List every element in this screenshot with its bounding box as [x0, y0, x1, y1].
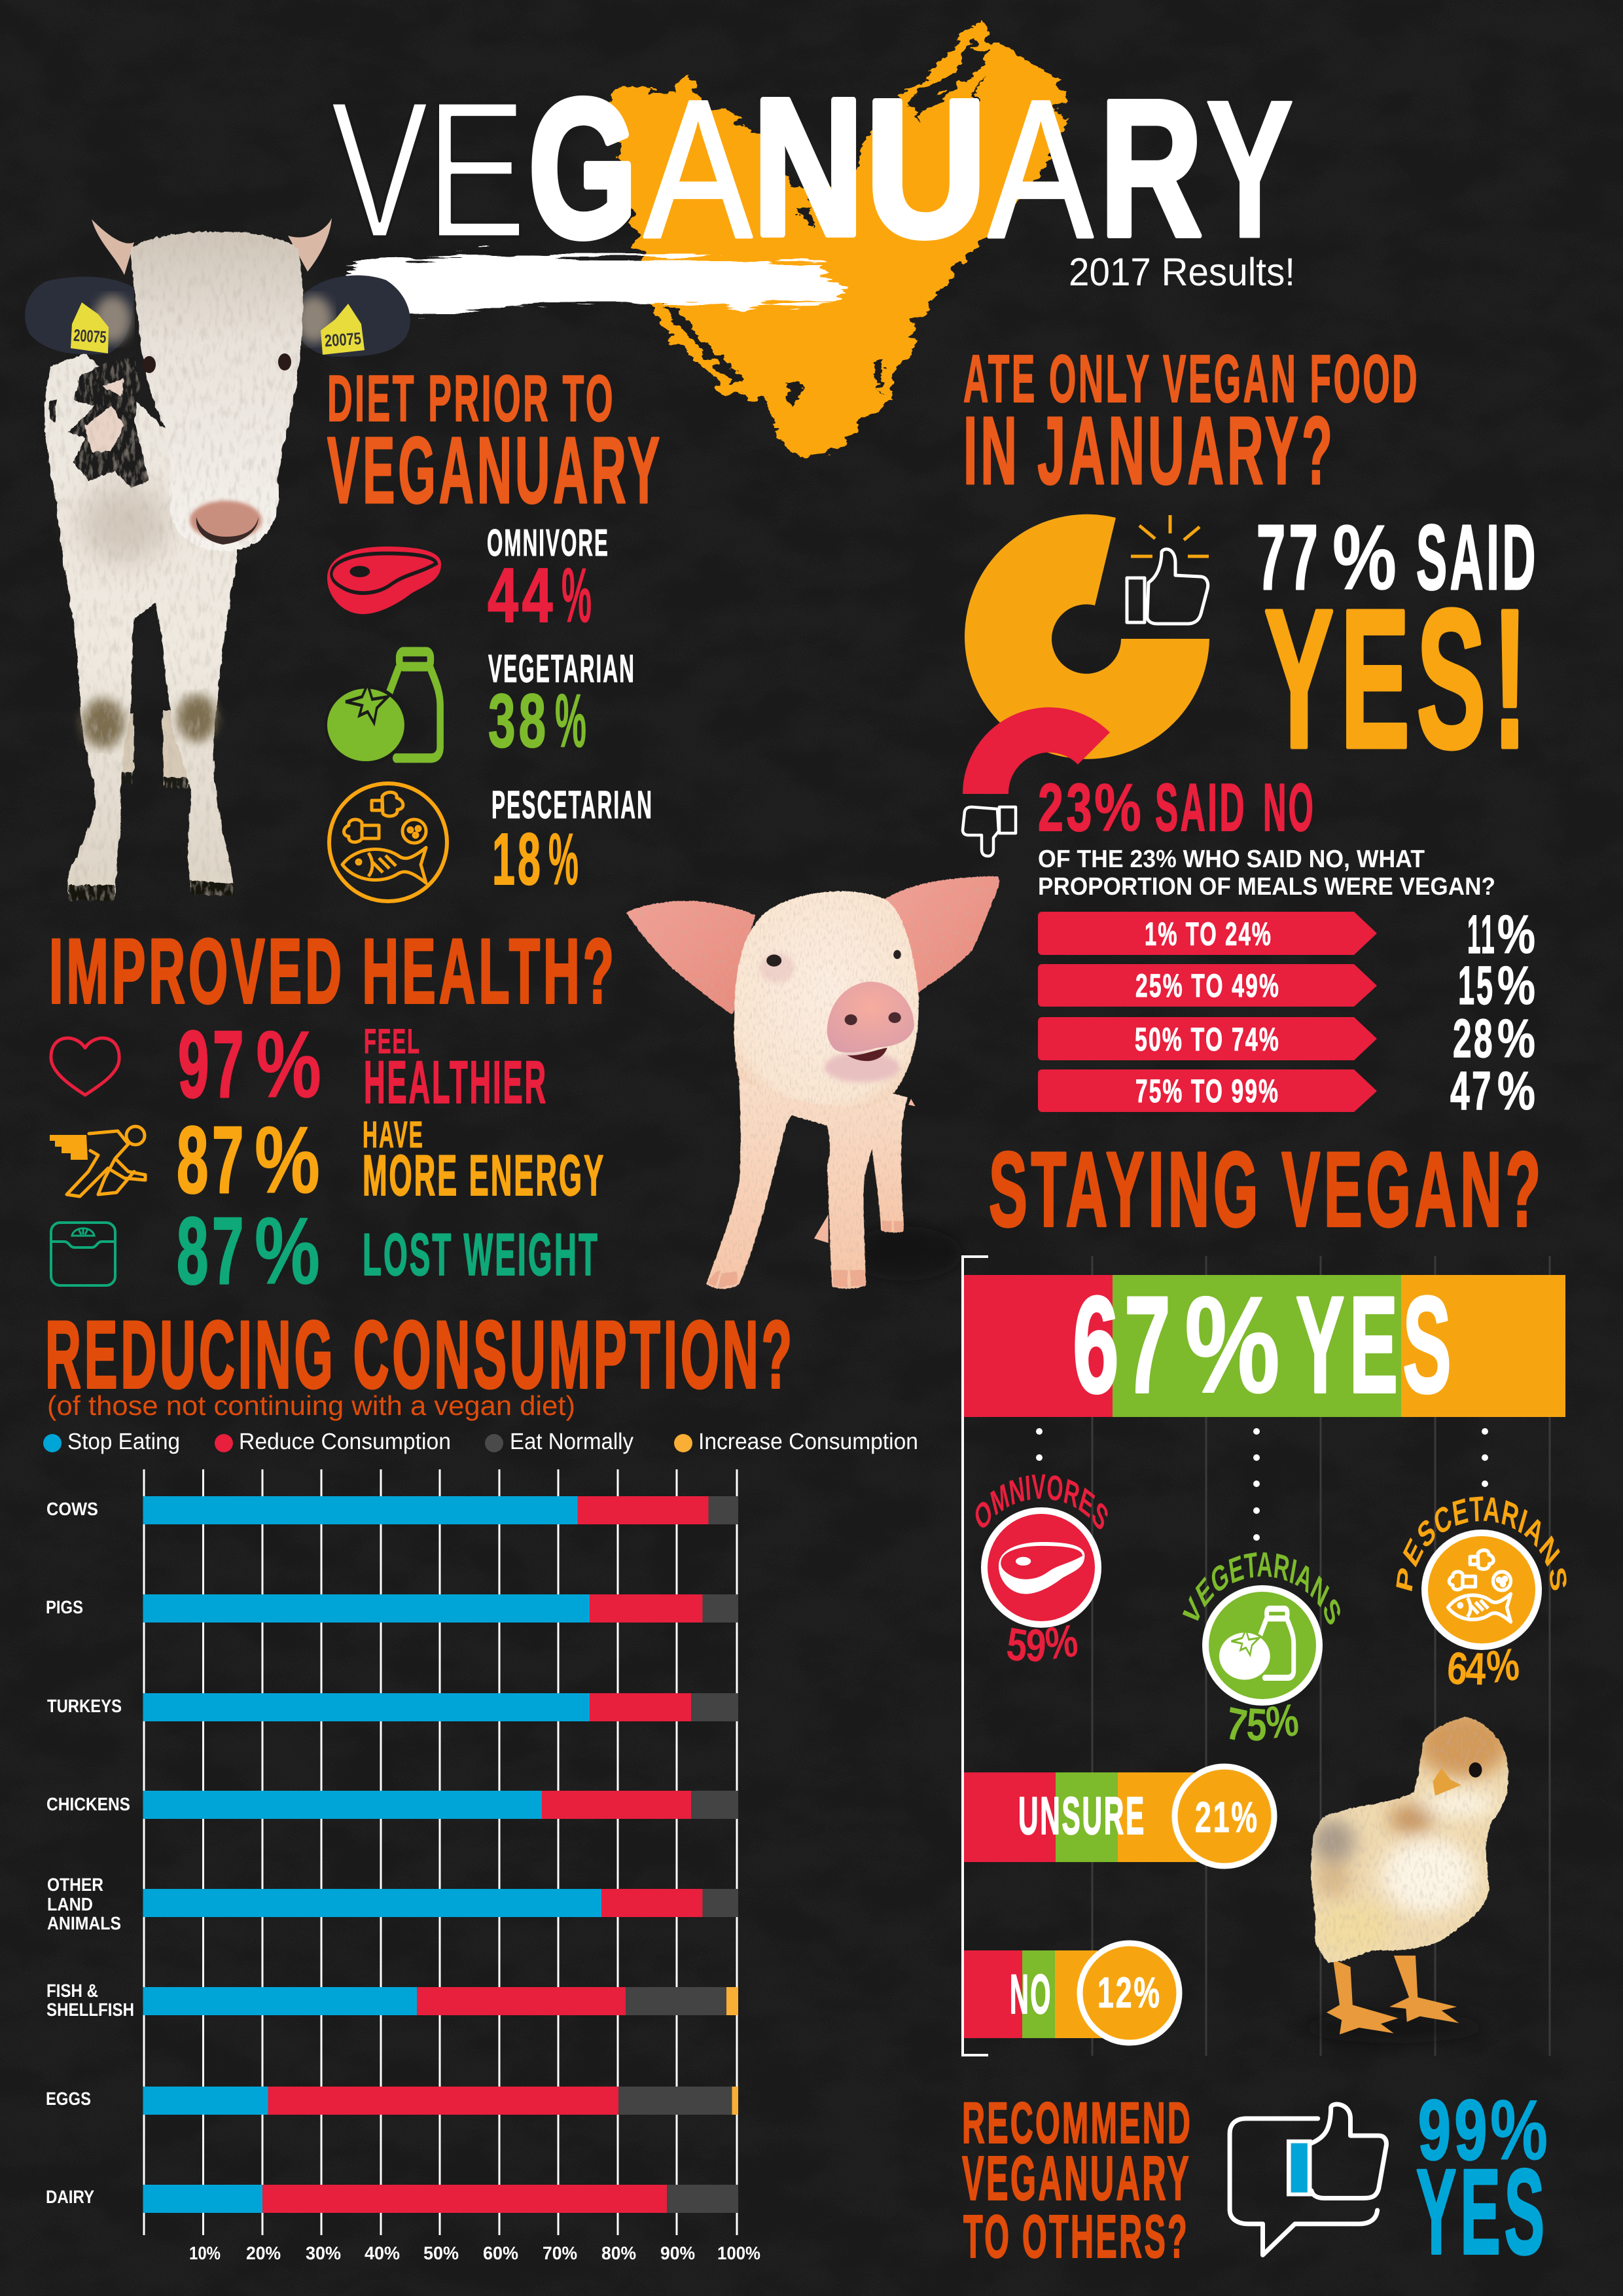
arrow bar chart: proportion of vegan meals: %	[1497, 955, 1535, 1016]
stat: vegetarian 38%: %	[555, 678, 586, 763]
chart row labels: COWS	[46, 1499, 98, 1519]
stat: 99% yes: %	[1490, 2082, 1548, 2178]
bar: 67% yes: YES	[1296, 1268, 1456, 1422]
bar: dairy	[143, 2185, 738, 2213]
infographic canvas: HEALTHIER	[364, 1049, 548, 1116]
stat: feel healthier	[178, 1011, 548, 1117]
chart axis labels	[189, 2243, 760, 2263]
stat: more energy: %	[255, 1107, 320, 1213]
arrow bar chart: proportion of vegan meals: 75% TO 99%	[1135, 1073, 1279, 1109]
stat: more energy	[177, 1107, 605, 1213]
heading: recommend veganuary to others	[962, 2090, 1192, 2270]
arrow bar chart: proportion of vegan meals: %	[1497, 904, 1535, 965]
chart row labels: EGGS	[46, 2089, 91, 2109]
icon: tomato and milk bottle	[326, 652, 440, 763]
chart axis labels: 70%	[543, 2243, 577, 2263]
badge: vegetarians 75%	[1182, 1552, 1340, 1752]
stat: 77% said yes: 77	[1257, 505, 1321, 609]
stat: more energy: HAVE	[363, 1114, 424, 1156]
chart row labels: SHELLFISH	[46, 2000, 134, 2020]
icon: bathroom scale	[51, 1223, 115, 1285]
stat: omnivore 44%: OMNIVORE	[487, 522, 609, 564]
brush heart	[611, 20, 1069, 459]
icon: heart	[51, 1038, 119, 1095]
stat: vegetarian 38%: VEGETARIAN	[488, 647, 635, 691]
heading: reducing consumption	[45, 1301, 795, 1421]
stat: omnivore 44%: %	[562, 552, 592, 639]
stacked bar chart	[143, 1469, 738, 2235]
arrow bar chart: proportion of vegan meals: 47	[1450, 1060, 1493, 1121]
badge: omnivores 59%: OMNIVORES	[975, 1474, 1108, 1529]
chart axis labels: 60%	[483, 2243, 518, 2263]
chart row labels: OTHER	[47, 1874, 103, 1895]
arrow bar chart: proportion of vegan meals: 28	[1453, 1008, 1495, 1069]
pig photo	[626, 876, 999, 1289]
stat: omnivore 44%	[487, 522, 609, 639]
stat: 23% said no: SAID	[1155, 770, 1247, 845]
arrow bar chart: proportion of vegan meals: 1% TO 24%	[1145, 916, 1272, 952]
badge: omnivores 59%: 59%	[1004, 1615, 1080, 1672]
badge: omnivores 59%	[975, 1474, 1108, 1672]
chart axis labels: 80%	[601, 2243, 636, 2263]
cow photo	[25, 218, 410, 901]
bar: no 12%: NO	[1010, 1964, 1052, 2026]
bar: turkeys	[143, 1693, 738, 1721]
bar: cows	[143, 1496, 738, 1524]
question text: PROPORTION OF MEALS WERE VEGAN?	[1038, 873, 1495, 901]
chart row labels: LAND	[47, 1894, 93, 1914]
icon: speech bubble with thumbs up	[1230, 2104, 1386, 2255]
stat: feel healthier: %	[256, 1011, 321, 1117]
stat: feel healthier: FEEL	[364, 1022, 421, 1061]
chart axis labels: 100%	[717, 2243, 760, 2263]
stat: pescetarian 18%	[491, 783, 653, 900]
chart row labels: ANIMALS	[47, 1913, 121, 1933]
title: VEGANUARY: G	[529, 60, 637, 278]
arrow bar chart: proportion of vegan meals: 11	[1467, 904, 1496, 965]
title: VEGANUARY: A	[644, 59, 753, 279]
bar: other land animals	[143, 1889, 738, 1917]
title: VEGANUARY: R	[1099, 60, 1203, 278]
badge: pescetarians 64%	[1396, 1496, 1567, 1695]
stat: more energy: MORE ENERGY	[363, 1143, 605, 1208]
bar: unsure 21%: UNSURE	[1018, 1787, 1146, 1846]
heading: recommend veganuary to others: VEGANUARY	[962, 2144, 1191, 2214]
icon: thumbs up	[1127, 515, 1209, 624]
grid lines and bracket	[963, 1256, 1550, 2056]
cow photo: 20075	[73, 325, 107, 347]
icon: running figure	[50, 1126, 145, 1196]
bar: 67% yes: 67	[1073, 1268, 1176, 1422]
heading: reducing consumption: (of those not continuing with a vegan diet)	[47, 1390, 575, 1421]
stat: vegetarian 38%: 38	[488, 678, 549, 763]
stat: 77% said yes	[1257, 505, 1539, 789]
cow photo: 20075	[324, 329, 362, 351]
stat: more energy: 87	[177, 1107, 247, 1213]
arrow bar chart: proportion of vegan meals: 50% TO 74%	[1135, 1021, 1280, 1058]
icon: thumbs down	[963, 807, 1016, 856]
chart row labels: PIGS	[46, 1597, 83, 1617]
question text: OF THE 23% WHO SAID NO, WHAT	[1038, 846, 1425, 873]
badge: vegetarians 75%: VEGETARIANS	[1182, 1552, 1340, 1624]
bar: unsure 21%	[964, 1767, 1274, 1866]
icon: fish plate	[329, 783, 447, 901]
stat: 23% said no	[1038, 770, 1315, 845]
stat: 99% yes	[1416, 2082, 1548, 2280]
title: VEGANUARY: U	[865, 60, 987, 278]
bar: no 12%: 12%	[1097, 1968, 1162, 2017]
title: VEGANUARY	[330, 58, 1294, 279]
chart axis labels: 50%	[423, 2243, 459, 2263]
bar: pigs	[143, 1594, 738, 1623]
bar: eggs	[143, 2087, 738, 2115]
subtitle: 2017 Results: 2017 Results!	[1069, 250, 1295, 294]
heading: improved health: IMPROVED HEALTH?	[49, 920, 617, 1022]
bar: 67% yes	[964, 1268, 1565, 1422]
chart row labels: FISH &	[46, 1981, 98, 2001]
arrow bar chart: proportion of vegan meals: 15	[1458, 955, 1495, 1016]
badge: pescetarians 64%: 64%	[1444, 1638, 1522, 1695]
chart row labels	[46, 1499, 134, 2207]
heading: diet prior to veganuary: VEGANUARY	[327, 418, 663, 523]
stat: lost weight: 87	[177, 1198, 247, 1304]
heading: diet prior to veganuary	[327, 362, 663, 523]
chart axis labels: 20%	[246, 2243, 281, 2263]
heading: diet prior to veganuary: DIET PRIOR TO	[327, 362, 615, 435]
chart axis labels: 10%	[189, 2243, 221, 2263]
infographic canvas: NO	[1263, 770, 1315, 845]
title: VEGANUARY: A	[988, 59, 1094, 279]
heading: recommend veganuary to others: RECOMMEND	[962, 2090, 1192, 2155]
chart legend: Reduce Consumption	[239, 1429, 451, 1454]
pie chart: 77% yes, 23% no	[963, 514, 1209, 794]
stat: vegetarian 38%	[488, 647, 635, 763]
badge: vegetarians 75%: 75%	[1223, 1694, 1300, 1752]
chart row labels: TURKEYS	[47, 1696, 122, 1716]
bar: fish and shellfish	[143, 1987, 738, 2015]
bar: 67% yes: %	[1185, 1268, 1280, 1422]
white brush stroke	[347, 252, 847, 315]
chart legend: Increase Consumption	[698, 1429, 918, 1454]
chart legend: Stop Eating	[67, 1429, 180, 1454]
arrow bar chart: proportion of vegan meals: 25% TO 49%	[1135, 967, 1280, 1004]
stat: 23% said no: %	[1094, 770, 1141, 845]
arrow bar chart: proportion of vegan meals: %	[1497, 1060, 1535, 1121]
chart row labels: CHICKENS	[46, 1794, 130, 1814]
chart axis labels: 30%	[306, 2243, 341, 2263]
heading: reducing consumption: REDUCING CONSUMPTION?	[45, 1301, 795, 1408]
badge: pescetarians 64%: PESCETARIANS	[1396, 1496, 1567, 1592]
chart axis labels: 90%	[660, 2243, 695, 2263]
chart row labels: DAIRY	[46, 2187, 94, 2207]
arrow bar chart: proportion of vegan meals	[1038, 904, 1535, 1121]
arrow bar chart: proportion of vegan meals: %	[1497, 1008, 1535, 1069]
stat: lost weight: LOST WEIGHT	[363, 1222, 599, 1288]
heading: recommend veganuary to others: TO OTHERS?	[963, 2202, 1189, 2270]
chart axis labels: 40%	[365, 2243, 400, 2263]
bar: no 12%	[964, 1943, 1179, 2043]
stat: omnivore 44%: 44	[488, 552, 556, 639]
bar: chickens	[143, 1791, 738, 1819]
chart legend	[43, 1429, 918, 1454]
stat: lost weight: %	[255, 1198, 320, 1304]
icon: steak	[327, 547, 441, 614]
stat: lost weight	[177, 1198, 599, 1304]
stat: 77% said yes: %	[1332, 505, 1397, 609]
stat: 99% yes: 99	[1418, 2082, 1491, 2178]
question text	[1038, 846, 1495, 901]
stat: feel healthier: 97	[178, 1011, 247, 1117]
title: VEGANUARY: Y	[1205, 59, 1294, 279]
stat: pescetarian 18%: 18	[492, 818, 543, 900]
stat: pescetarian 18%: PESCETARIAN	[491, 783, 653, 827]
title: VEGANUARY: N	[753, 58, 864, 276]
bar: unsure 21%: 21%	[1195, 1793, 1259, 1841]
chick photo	[1303, 1710, 1516, 2043]
chart legend: Eat Normally	[510, 1429, 633, 1454]
title: VEGANUARY: V	[330, 61, 429, 279]
title: VEGANUARY: E	[425, 61, 527, 279]
heading: ate only vegan food in january	[963, 341, 1419, 505]
stat: 23% said no: 23	[1038, 770, 1095, 845]
dotted connectors	[1036, 1428, 1488, 1541]
stat: pescetarian 18%: %	[548, 818, 579, 900]
